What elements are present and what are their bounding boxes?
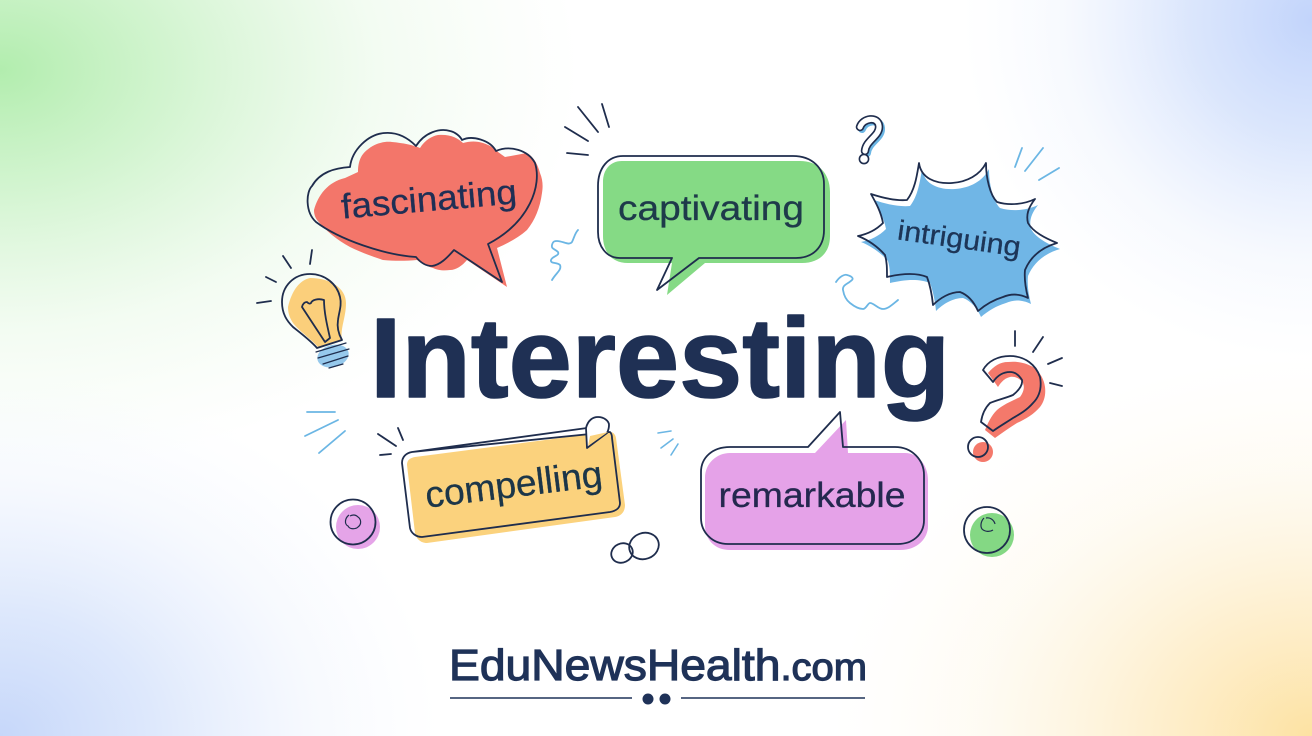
accent: blue squiggle	[551, 230, 578, 280]
icon: small question mark	[859, 119, 881, 164]
icon: red question mark	[968, 331, 1062, 462]
accent: blue dashes top right	[1015, 148, 1059, 180]
icon: linked circles	[608, 529, 663, 566]
label: captivating: captivating	[618, 189, 804, 228]
brand footer	[449, 641, 867, 704]
speech bubble: fascinating	[308, 130, 543, 287]
accent: sparks above captivating	[565, 104, 609, 155]
icon: purple circle	[330, 500, 380, 549]
label: compelling: compelling	[423, 453, 605, 516]
icon: green circle	[964, 507, 1014, 557]
label: intriguing: intriguing	[896, 215, 1023, 262]
accent: blue swirl	[836, 275, 898, 309]
accent: blue dashes left	[305, 412, 345, 453]
brand divider	[450, 697, 865, 699]
brand name: EduNewsHealth .com	[449, 641, 867, 690]
icon: light bulb	[257, 250, 351, 371]
speech bubble: intriguing	[858, 163, 1060, 317]
speech bubble: compelling	[402, 417, 625, 543]
speech bubble: remarkable	[701, 412, 928, 550]
speech tail	[586, 417, 609, 448]
label: remarkable: remarkable	[718, 476, 906, 515]
accent: small blue sparks	[658, 431, 678, 455]
accent: dark sparks near compelling	[378, 428, 403, 455]
speech bubble: captivating	[598, 156, 830, 295]
title: Interesting: Interesting	[370, 295, 950, 422]
label: fascinating: fascinating	[340, 172, 518, 227]
